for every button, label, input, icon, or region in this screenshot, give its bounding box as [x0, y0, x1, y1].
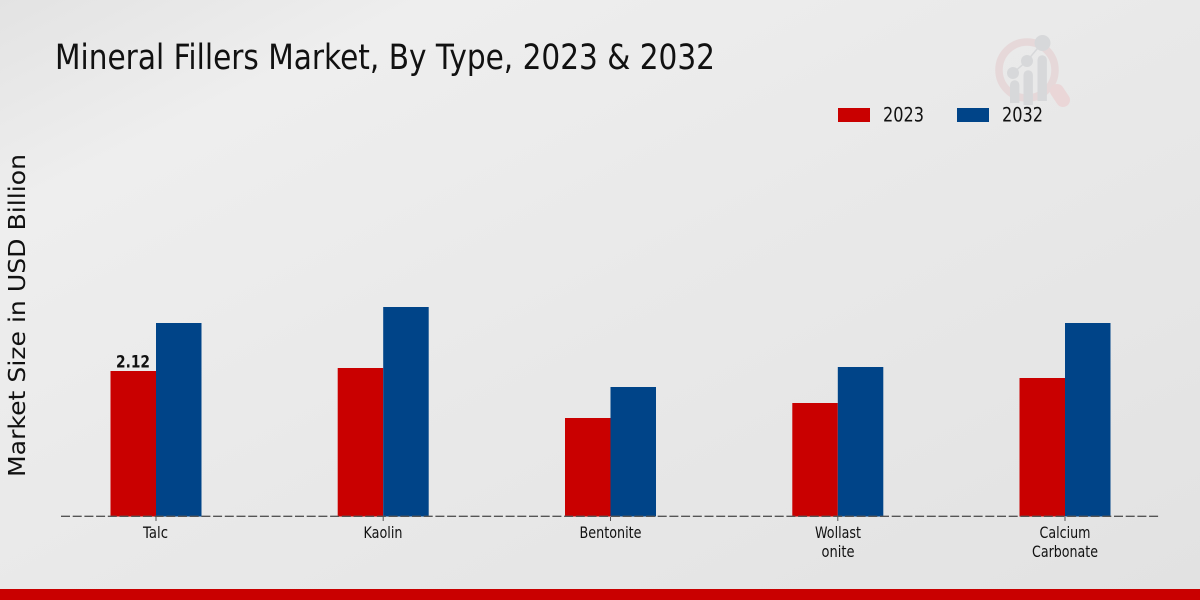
bars: Kaolin	[338, 307, 429, 516]
x axis tick marks	[156, 517, 1065, 521]
label: Talc: Talc	[142, 523, 168, 542]
label: Calcium Carbonate	[1032, 523, 1098, 561]
legend item: 2023: 2023	[883, 104, 924, 126]
label: Calcium Carbonate: Carbonate	[1032, 542, 1098, 561]
legend item: 2023	[838, 104, 924, 126]
legend item: 2032: 2032	[1002, 104, 1043, 126]
x axis baseline	[61, 515, 1159, 517]
y axis title: Market Size in USD Billion	[5, 154, 31, 477]
bottom red band	[0, 589, 1200, 600]
label: Kaolin: Kaolin	[364, 523, 402, 542]
label: Wollastonite: Wollast	[815, 523, 861, 542]
bars: Wollastonite	[792, 367, 883, 516]
label: Wollastonite: onite	[822, 542, 854, 561]
bars: Bentonite	[565, 387, 656, 516]
icon: watermark logo	[999, 35, 1063, 105]
legend	[838, 104, 1043, 126]
title: Mineral Fillers Market, By Type, 2023 & 2032	[55, 38, 715, 78]
legend item: 2032	[957, 104, 1043, 126]
label: Calcium Carbonate: Calcium	[1040, 523, 1090, 542]
label: Wollastonite	[815, 523, 861, 561]
bars: Talc	[110, 323, 202, 516]
data label: 2.12: 2.12	[116, 352, 150, 372]
bars: Calcium Carbonate	[1020, 323, 1110, 516]
bar chart	[61, 307, 1159, 561]
label: Bentonite: Bentonite	[580, 523, 642, 542]
x axis labels	[142, 523, 1098, 561]
